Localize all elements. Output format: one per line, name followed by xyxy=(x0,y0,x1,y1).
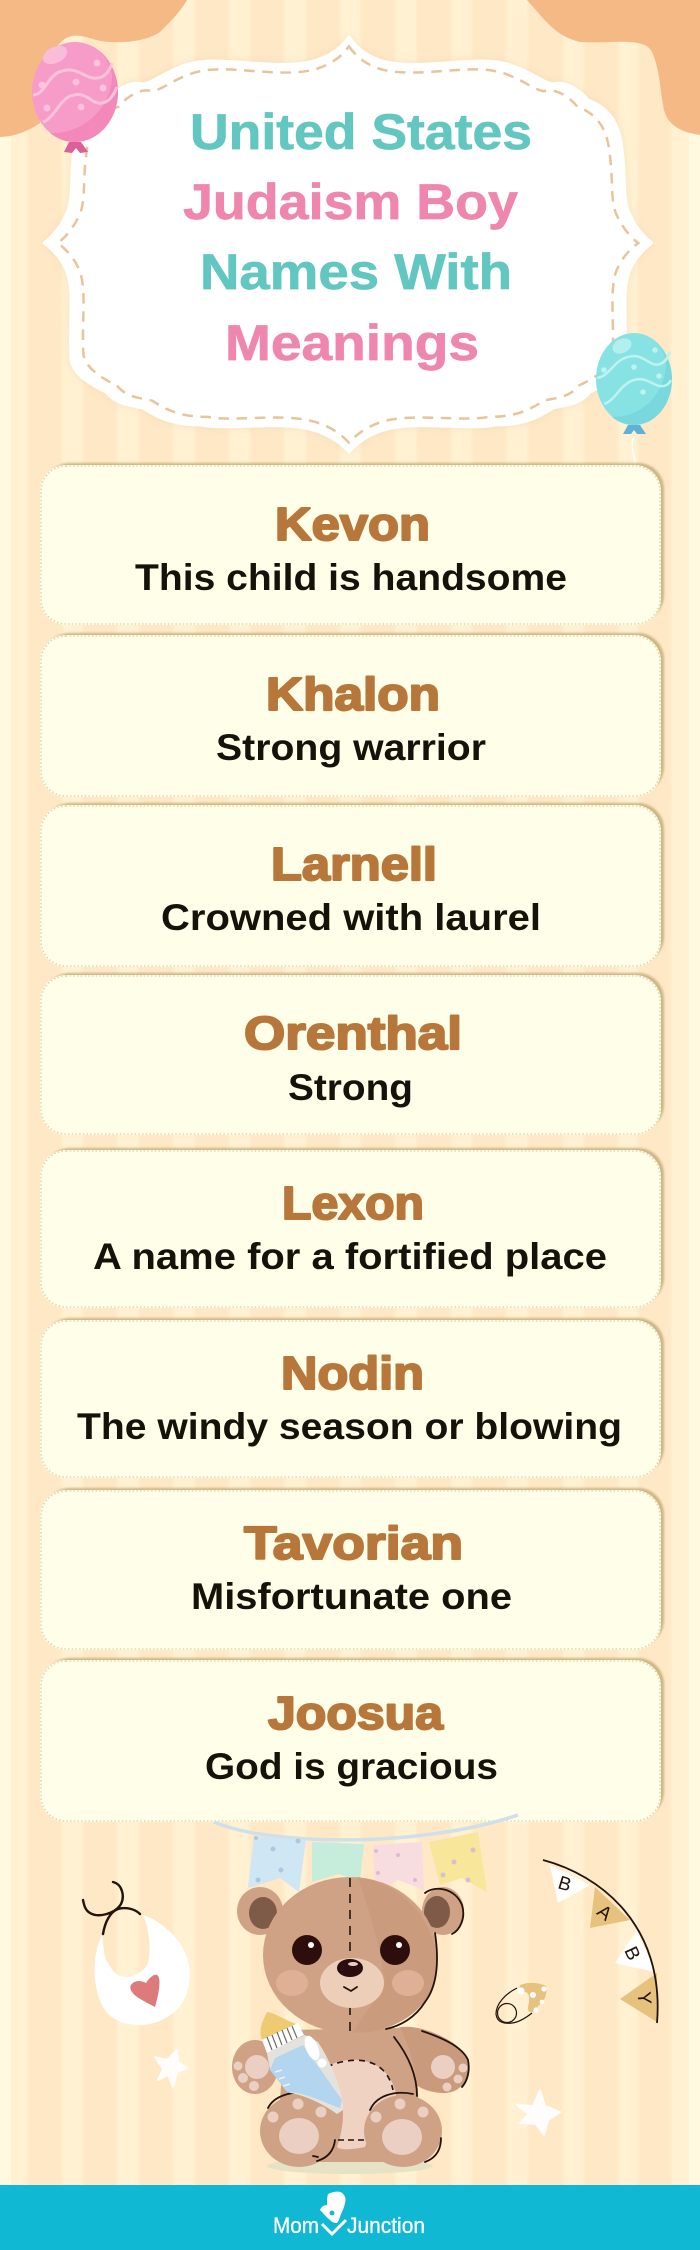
icon: BABY banner: B xyxy=(619,1943,644,1964)
curtain: top right xyxy=(527,0,700,135)
icon: BABY banner xyxy=(543,1860,658,2023)
card: Lexon: A name for a fortified place xyxy=(93,1236,607,1277)
card: Orenthal: Strong xyxy=(288,1067,413,1108)
card: Tavorian xyxy=(40,1488,664,1650)
card: Khalon: Strong warrior xyxy=(216,727,486,768)
baby bottle xyxy=(261,2012,343,2114)
teddy bear xyxy=(232,1877,469,2174)
card: Khalon: Khalon xyxy=(266,668,440,720)
card: Tavorian: Tavorian xyxy=(244,1517,463,1569)
icon: BABY banner: Y xyxy=(632,1991,655,2006)
curtain: top left xyxy=(0,0,187,137)
MomJunction logo xyxy=(273,2192,425,2238)
card: Lexon xyxy=(40,1148,664,1308)
icon: BABY banner: B xyxy=(555,1873,574,1896)
card: Larnell: Larnell xyxy=(271,838,437,890)
card: Joosua: Joosua xyxy=(268,1687,443,1739)
title: United States xyxy=(190,104,532,160)
bunting flags xyxy=(214,1815,518,1892)
card: Joosua xyxy=(40,1658,664,1822)
bear foot right xyxy=(364,2093,442,2167)
icon: star left xyxy=(155,2050,187,2087)
card: Nodin xyxy=(40,1318,664,1478)
card: Orenthal: Orenthal xyxy=(244,1007,462,1059)
card: Kevon: Kevon xyxy=(275,498,430,550)
bear shadow xyxy=(267,2158,433,2174)
icon: star right xyxy=(517,2090,560,2135)
MomJunction logo: Junction xyxy=(347,2213,425,2238)
card: Orenthal xyxy=(40,973,664,1135)
MomJunction logo: Mom xyxy=(273,2213,319,2238)
icon: safety pin xyxy=(496,1983,547,2023)
card: Kevon: This child is handsome xyxy=(135,557,567,598)
card: Nodin: The windy season or blowing xyxy=(77,1406,622,1447)
card: Joosua: God is gracious xyxy=(205,1746,498,1787)
icon: bib xyxy=(83,1882,190,2025)
icon: pink balloon xyxy=(32,42,118,153)
bear ears xyxy=(237,1887,464,1935)
title: Meanings xyxy=(225,315,479,371)
icon: BABY banner: A xyxy=(593,1901,616,1926)
card: Larnell: Crowned with laurel xyxy=(161,897,541,938)
card: Larnell xyxy=(40,803,664,967)
bear arm right xyxy=(397,2027,469,2093)
card: Khalon xyxy=(40,633,664,797)
bear head xyxy=(263,1877,437,2033)
footer bar xyxy=(0,2185,700,2250)
title: Names With xyxy=(200,244,512,300)
title plaque xyxy=(44,37,652,452)
card: Tavorian: Misfortunate one xyxy=(191,1576,512,1617)
card: Nodin: Nodin xyxy=(281,1347,424,1399)
bear body xyxy=(280,2028,418,2162)
bear belly patch xyxy=(327,2060,396,2149)
bear arm left xyxy=(232,2040,278,2094)
card: Lexon: Lexon xyxy=(282,1177,424,1229)
title xyxy=(183,104,532,371)
title: Judaism Boy xyxy=(183,174,518,230)
icon: blue balloon xyxy=(596,333,672,475)
bear foot left xyxy=(260,2093,338,2167)
card: Kevon xyxy=(40,463,664,625)
